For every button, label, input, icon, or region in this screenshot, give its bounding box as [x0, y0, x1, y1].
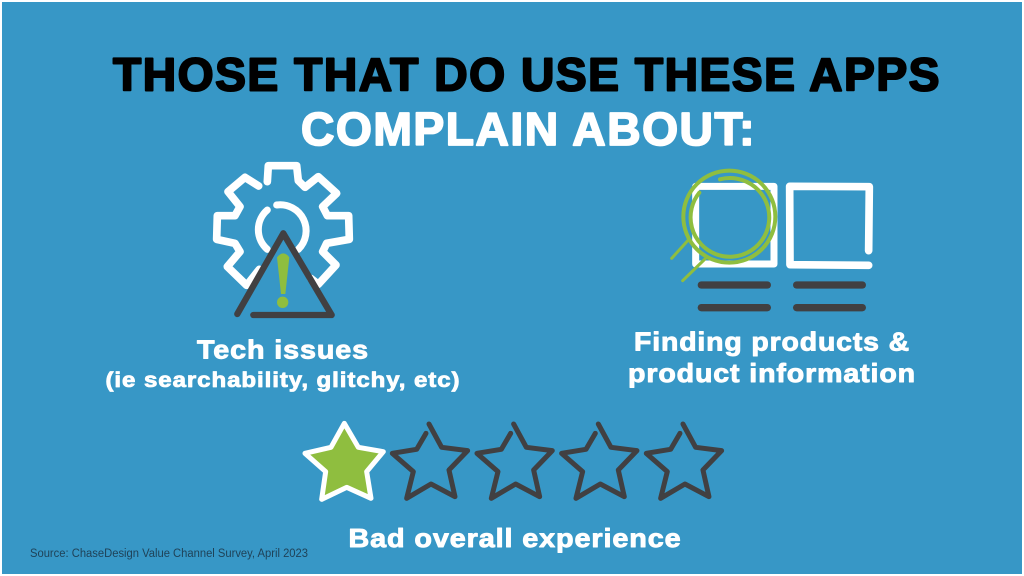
text lines [701, 285, 862, 308]
empty star 3 [562, 424, 637, 498]
label: finding products [628, 326, 916, 388]
label: finding products: product information [628, 358, 916, 388]
label: finding products: Finding products & [634, 326, 910, 356]
title line 1: THOSE THAT DO USE THESE APPS [113, 48, 941, 100]
icon: product boxes with magnifier [672, 171, 869, 308]
label: bad overall experience: Bad overall experience [348, 523, 682, 553]
left product box [696, 186, 774, 264]
label: tech issues [106, 334, 460, 392]
magnifier [672, 171, 775, 281]
title line 2: COMPLAIN ABOUT: [301, 103, 756, 155]
empty star 4 [646, 424, 722, 498]
empty star 1 [392, 424, 468, 498]
title [113, 48, 941, 155]
filled star [305, 423, 383, 499]
gear outline [217, 166, 349, 285]
warning triangle [237, 233, 332, 315]
right product box [790, 186, 869, 265]
star rating [305, 423, 722, 499]
exclamation mark [277, 253, 289, 294]
label: tech issues: Tech issues [197, 334, 369, 364]
icon: gear with warning triangle [217, 166, 349, 315]
empty star 2 [477, 424, 552, 498]
label: tech issues: (ie searchability, glitchy, etc) [106, 369, 460, 392]
source note: Source: ChaseDesign Value Channel Survey, April 2023 [30, 548, 308, 560]
